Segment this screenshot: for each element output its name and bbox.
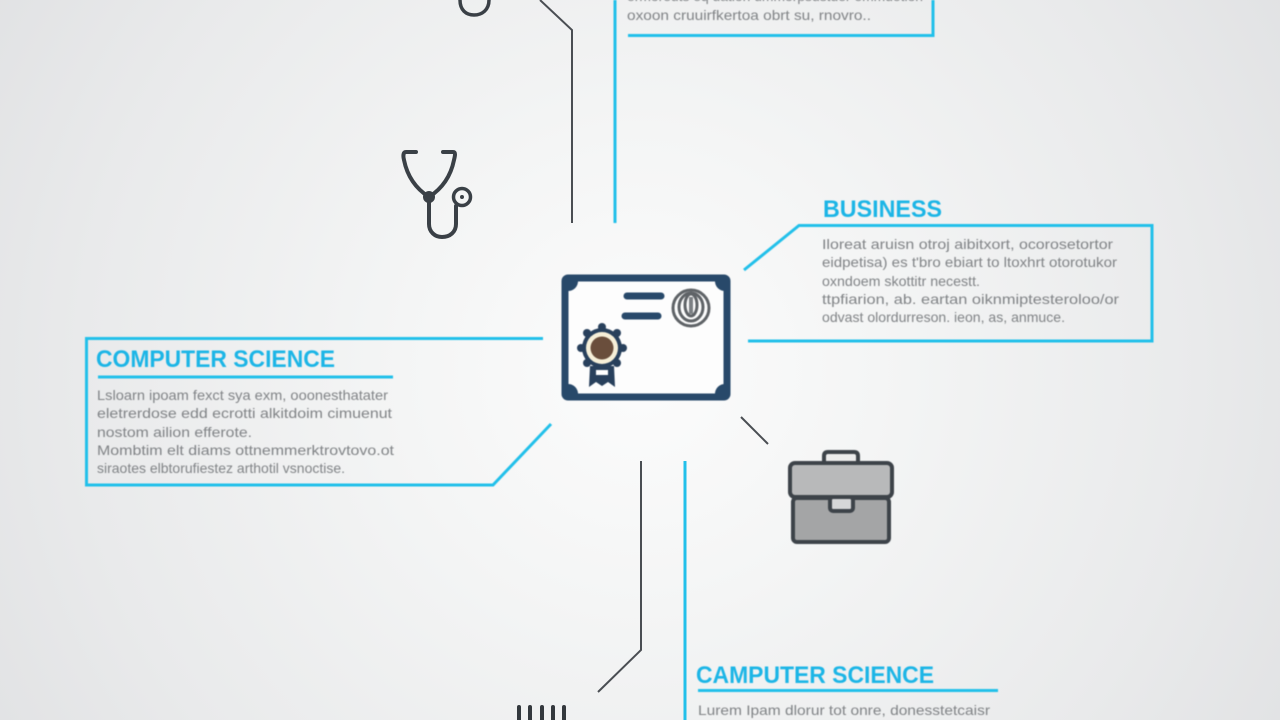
connector: top dark line bbox=[540, 0, 572, 223]
icon: partial ring at top bbox=[460, 0, 489, 15]
connector: bottom cyan line bbox=[684, 461, 686, 720]
bottom panel heading rule bbox=[698, 689, 998, 692]
panel: top partial text box bbox=[615, 0, 933, 223]
connector: short diagonal to briefcase bbox=[741, 417, 768, 444]
certificate seal with ribbon bbox=[577, 323, 627, 387]
business body text: oxndoem skottitr necestt. bbox=[822, 273, 980, 289]
certificate corners bbox=[567, 280, 726, 395]
left panel body text: nostom ailion efferote. bbox=[97, 424, 252, 440]
panel: computer science bottom bbox=[696, 662, 998, 718]
business body text bbox=[822, 236, 1119, 325]
panel: computer science left bbox=[86, 338, 551, 485]
top panel body text bbox=[627, 0, 923, 23]
left panel body text: eletrerdose edd ecrotti alkitdoim cimuenut bbox=[97, 405, 392, 421]
business heading: BUSINESS bbox=[823, 196, 942, 223]
business body text: Iloreat aruisn otroj aibitxort, ocorosetortor bbox=[822, 236, 1113, 252]
certificate frame bbox=[565, 278, 727, 397]
icon: partial bars at bottom bbox=[519, 707, 564, 720]
business body text: odvast olordurreson. ieon, as, anmuce. bbox=[822, 309, 1065, 325]
bottom panel body text: Lurem Ipam dlorur tot onre, donesstetcaisr bbox=[698, 702, 990, 718]
left panel heading rule bbox=[98, 376, 393, 378]
icon: briefcase bbox=[790, 452, 892, 542]
business body text: eidpetisa) es t'bro ebiart to ltoxhrt otorotukor bbox=[822, 254, 1117, 270]
left panel heading: COMPUTER SCIENCE bbox=[96, 346, 335, 373]
certificate text bars bbox=[625, 296, 661, 316]
left panel body text: Mombtim elt diams ottnemmerktrovtovo.ot bbox=[97, 442, 394, 458]
icon: stethoscope bbox=[403, 152, 470, 237]
panel: business bbox=[744, 196, 1152, 341]
certificate stamp bbox=[673, 290, 709, 326]
top panel body text: oxoon cruuirfkertoa obrt su, rnovro.. bbox=[627, 7, 871, 23]
top panel outline bbox=[615, 0, 933, 223]
left panel body text: Lsloarn ipoam fexct sya exm, ooonesthatater bbox=[97, 387, 388, 403]
left panel outline bbox=[86, 338, 551, 485]
left panel body text: siraotes elbtorufiestez arthotil vsnoctise. bbox=[97, 460, 345, 476]
connector: bottom dark line bbox=[598, 461, 641, 692]
icon: central certificate bbox=[565, 278, 727, 397]
business outline bbox=[744, 226, 1152, 341]
left panel body text bbox=[97, 387, 394, 476]
business body text: ttpfiarion, ab. eartan oiknmiptesteroloo/or bbox=[822, 291, 1119, 307]
bottom panel heading: CAMPUTER SCIENCE bbox=[696, 662, 934, 689]
